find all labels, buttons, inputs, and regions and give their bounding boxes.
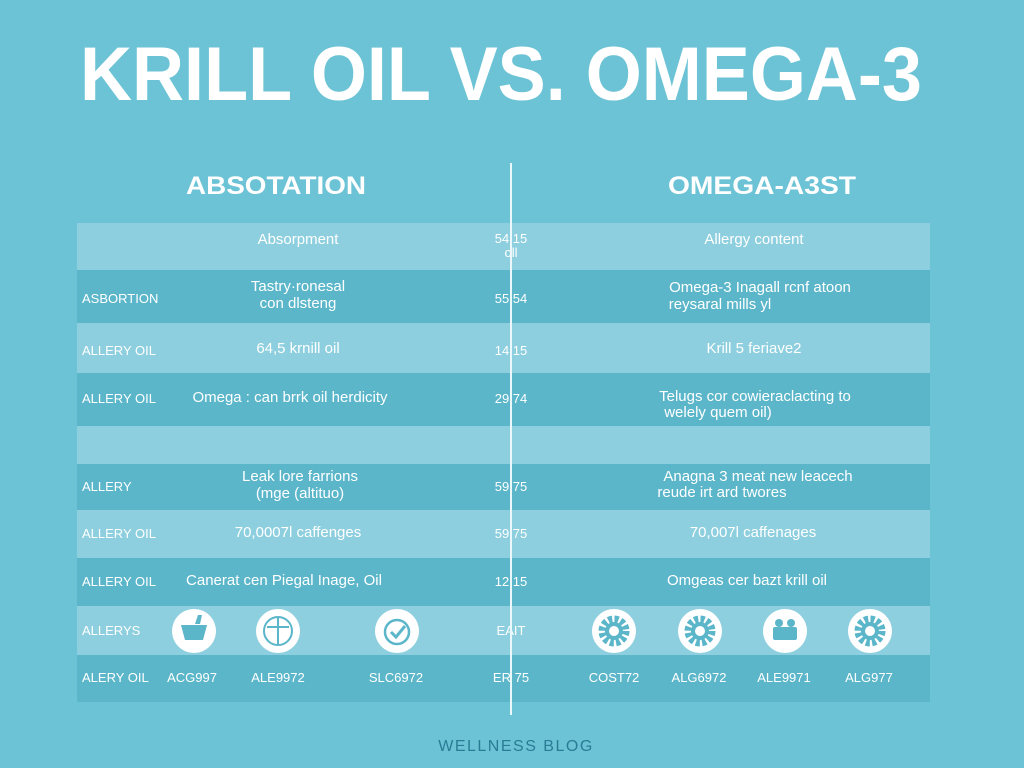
left column text: Tastry·ronesal <box>251 278 345 295</box>
row labels: ALLERY <box>82 479 132 494</box>
left column text: con dlsteng <box>260 295 336 312</box>
icon: people <box>763 609 807 653</box>
footer: WELLNESS BLOG <box>438 738 594 755</box>
middle numbers: 55 54 <box>495 291 527 306</box>
row labels: ALLERY OIL <box>82 343 156 358</box>
row labels: ALERY OIL <box>82 670 149 685</box>
right column text: Omega-3 Inagall rcnf atoon <box>669 279 851 296</box>
left column text: 64,5 krnill oil <box>256 340 340 357</box>
bottom codes: SLC6972 <box>369 670 423 685</box>
right column text: 70,007l caffenages <box>690 524 816 541</box>
icon: basket <box>172 609 216 653</box>
bottom codes: ALG6972 <box>672 670 726 685</box>
left column text: 70,0007l caffenges <box>235 524 361 541</box>
bottom codes: ALG977 <box>845 670 893 685</box>
comparison table <box>77 223 930 702</box>
icon: check badge <box>375 609 419 653</box>
middle numbers: 29 74 <box>495 391 527 406</box>
middle numbers <box>493 231 529 685</box>
bottom codes: ALE9972 <box>251 670 305 685</box>
middle numbers: EAIT <box>497 623 526 638</box>
middle numbers: 12 15 <box>495 574 527 589</box>
left column text: Canerat cen Piegal Inage, Oil <box>186 572 382 589</box>
right column text: Krill 5 feriave2 <box>706 340 802 357</box>
left column text: Leak lore farrions <box>242 468 358 485</box>
middle numbers: 59 75 <box>495 526 527 541</box>
icon: gear 1 <box>592 609 636 653</box>
left column text: (mge (altituo) <box>256 485 344 502</box>
right column text: Telugs cor cowieraclacting to <box>659 388 851 405</box>
middle numbers: ER 75 <box>493 670 529 685</box>
row labels: ALLERYS <box>82 623 141 638</box>
left column text: Absorpment <box>258 231 339 248</box>
column heading: right: OMEGA-A3ST <box>668 172 856 200</box>
left column text: Omega : can brrk oil herdicity <box>192 389 388 406</box>
title: KRILL OIL VS. OMEGA-3 <box>80 32 922 117</box>
right column text: Omgeas cer bazt krill oil <box>667 572 827 589</box>
bottom codes: ACG997 <box>167 670 217 685</box>
right column text: Allergy content <box>704 231 804 248</box>
center divider line <box>510 163 512 715</box>
icon: gear 2 <box>678 609 722 653</box>
row labels <box>82 291 158 685</box>
middle numbers: 54 15 <box>495 231 527 246</box>
middle numbers: 14 15 <box>495 343 527 358</box>
right column text: Anagna 3 meat new leacech <box>663 468 853 485</box>
row labels: ALLERY OIL <box>82 526 156 541</box>
row labels: ASBORTION <box>82 291 158 306</box>
right column text: welely quem oil) <box>663 404 772 421</box>
bottom codes: ALE9971 <box>757 670 811 685</box>
bottom codes <box>167 670 893 685</box>
right column text: reude irt ard twores <box>657 484 787 501</box>
bottom codes: COST72 <box>589 670 639 685</box>
right column text <box>657 231 853 589</box>
icon: globe cross <box>256 609 300 653</box>
row labels: ALLERY OIL <box>82 391 156 406</box>
column heading: left: ABSOTATION <box>186 172 366 200</box>
left column text <box>186 231 388 589</box>
icons row <box>172 609 892 653</box>
right column text: reysaral mills yl <box>669 296 771 313</box>
row labels: ALLERY OIL <box>82 574 156 589</box>
middle numbers: 59 75 <box>495 479 527 494</box>
middle numbers: oll <box>504 245 518 260</box>
icon: gear 3 <box>848 609 892 653</box>
